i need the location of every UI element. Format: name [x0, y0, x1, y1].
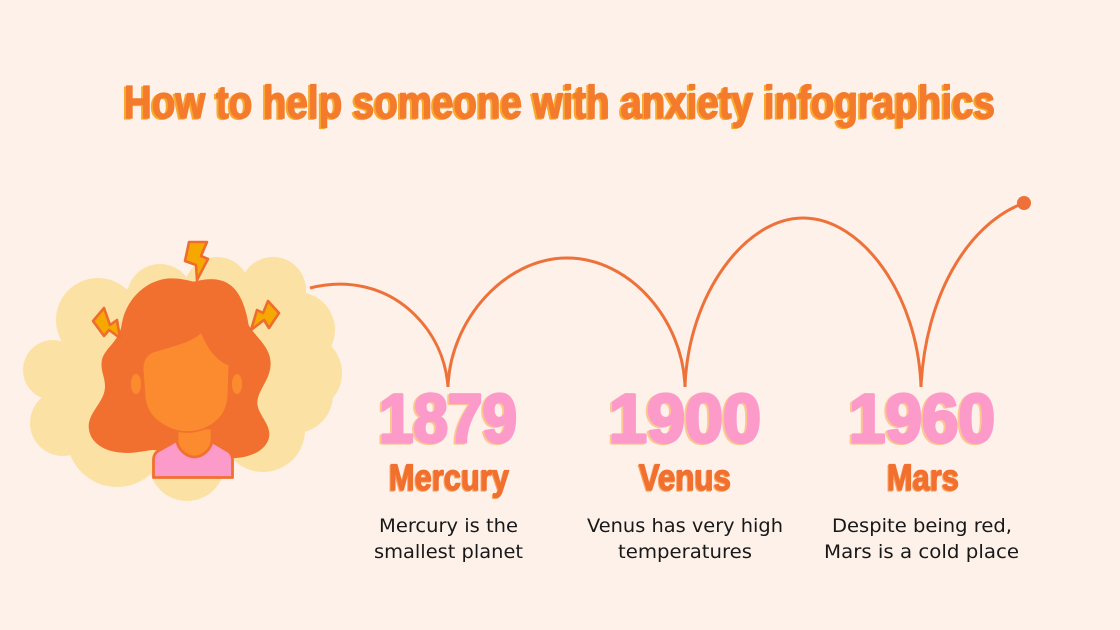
text: Mercury description: smallest planet — [374, 541, 523, 563]
woman figure — [89, 242, 279, 478]
year: 1900: 1900 — [609, 380, 761, 457]
year: 1879: 1879 — [379, 380, 517, 457]
heading: Mercury: Mercury — [389, 457, 509, 498]
heading: Mars: Mars — [887, 457, 959, 498]
ears — [131, 374, 242, 394]
neck — [177, 428, 212, 457]
heading: Venus: Venus — [639, 457, 731, 498]
illustration: anxious woman in a cloud — [23, 242, 342, 501]
text: Venus description — [587, 515, 783, 563]
text: Mars description — [824, 515, 1019, 563]
timeline curve with end dot — [310, 196, 1031, 387]
cloud background — [23, 257, 342, 501]
text: Mercury description — [374, 515, 523, 563]
text: Venus description: Venus has very high — [587, 515, 783, 537]
text: Mars description: Mars is a cold place — [824, 541, 1019, 563]
lightning bolt left — [93, 308, 120, 338]
shirt — [154, 441, 232, 478]
lightning bolt top — [185, 242, 208, 280]
text: Mars description: Despite being red, — [832, 515, 1012, 537]
text: Venus description: temperatures — [618, 541, 752, 563]
text: Mercury description: Mercury is the — [379, 515, 518, 537]
lightning bolt right — [251, 301, 279, 330]
face — [143, 332, 229, 432]
hair — [89, 278, 271, 458]
year: 1960: 1960 — [849, 380, 995, 457]
